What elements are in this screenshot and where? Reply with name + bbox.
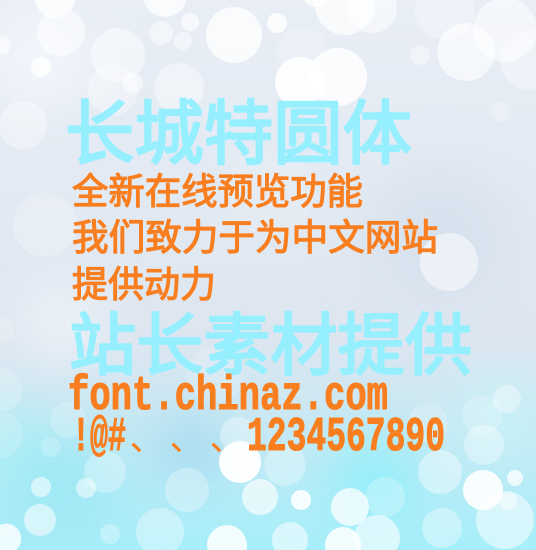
text line: 提供动力: 提供动力 <box>72 255 216 308</box>
heading: 站长素材提供: 站长素材提供 <box>69 292 472 389</box>
bokeh lights: lower area <box>0 316 534 550</box>
digits: 1234567890 <box>247 411 445 465</box>
url: font.chinaz.com: font.chinaz.com <box>68 370 388 424</box>
pause marks <box>130 414 242 460</box>
text line: 我们致力于为中文网站: 我们致力于为中文网站 <box>72 208 438 261</box>
bokeh lights: upper area <box>0 0 536 291</box>
title: 长城特圆体: 长城特圆体 <box>65 78 412 179</box>
pause marks: 、 <box>130 414 162 460</box>
text line: 全新在线预览功能: 全新在线预览功能 <box>72 162 363 215</box>
characters and digits <box>72 411 445 465</box>
pause marks: 、 <box>170 414 202 460</box>
symbols: !@# <box>72 411 126 465</box>
pause marks: 、 <box>210 414 242 460</box>
